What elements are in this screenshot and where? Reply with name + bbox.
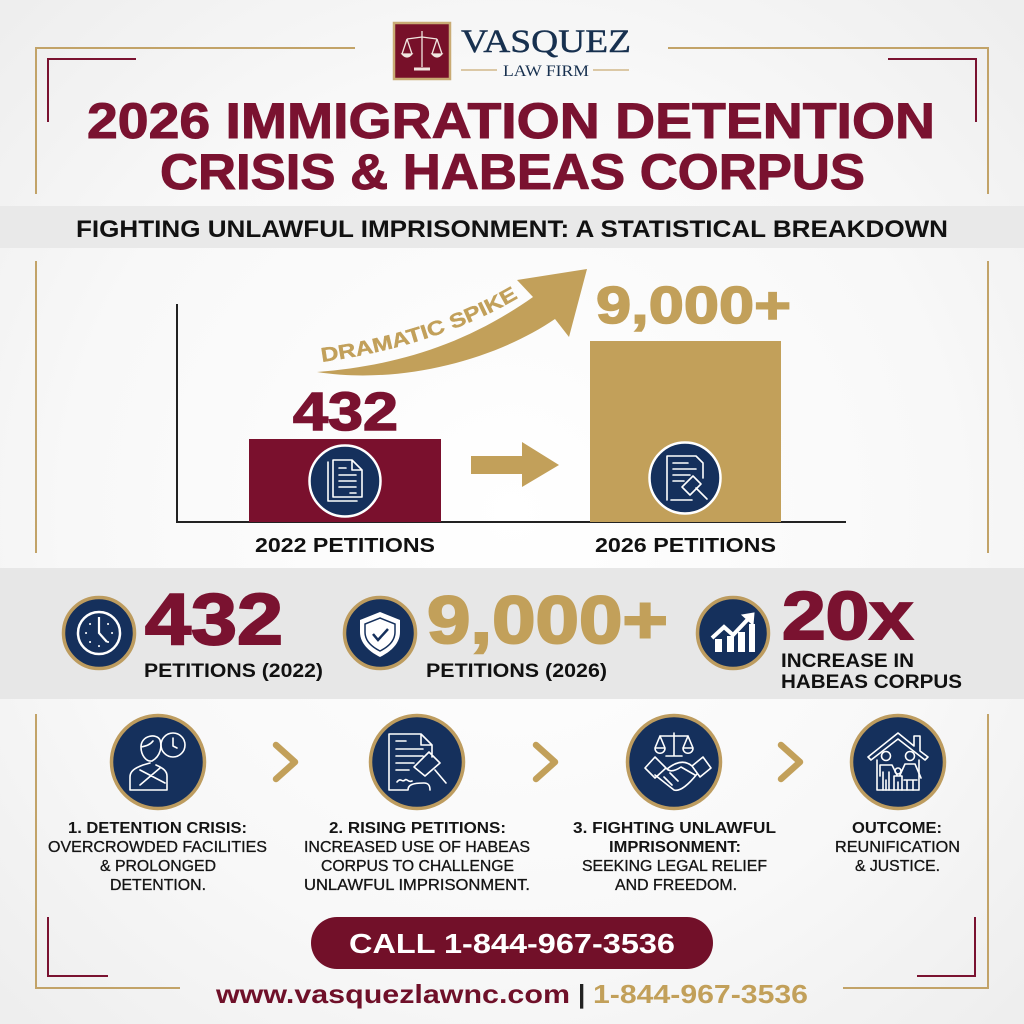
arrow: chevron 3 bbox=[781, 745, 800, 779]
panel: step 3 fighting unlawful imprisonment bbox=[573, 716, 776, 894]
icon: scales of justice logo bbox=[394, 23, 450, 79]
bar: 2022 bbox=[249, 439, 441, 522]
stat: 9,000+ petitions 2026: 9,000+ bbox=[427, 583, 668, 658]
text: step 3: AND FREEDOM. bbox=[615, 877, 737, 894]
label: 2022 petitions: 2022 PETITIONS bbox=[255, 535, 435, 557]
footer contact line: | bbox=[578, 979, 585, 1009]
text: step 1: 1. DETENTION CRISIS: bbox=[68, 820, 247, 837]
bar: 2026 bbox=[590, 341, 781, 522]
icon: shield bbox=[344, 598, 416, 668]
panel: step 1 detention crisis bbox=[48, 716, 267, 894]
icon: document and gavel bbox=[650, 442, 720, 514]
title bbox=[87, 93, 935, 200]
stat: 20x increase: 20x bbox=[782, 578, 913, 654]
text: outcome: REUNIFICATION bbox=[835, 839, 960, 856]
text: step 3 bbox=[573, 820, 776, 894]
text: step 1 bbox=[48, 820, 267, 894]
value: 432: 432 bbox=[293, 382, 398, 442]
text: outcome: OUTCOME: bbox=[852, 820, 942, 837]
stat: 20x increase: INCREASE IN bbox=[781, 650, 914, 672]
text: step 3: SEEKING LEGAL RELIEF bbox=[582, 858, 767, 875]
icon: family in house bbox=[852, 716, 944, 808]
text: step 2: INCREASED USE OF HABEAS bbox=[304, 839, 530, 856]
stat: 20x increase bbox=[698, 578, 962, 693]
call to action button: CALL 1-844-967-3536 bbox=[349, 928, 675, 959]
text: step 1: DETENTION. bbox=[110, 877, 206, 894]
footer contact line bbox=[215, 979, 808, 1009]
call to action button bbox=[311, 917, 713, 969]
logo wordmark: VASQUEZ bbox=[461, 24, 631, 60]
text: step 1: & PROLONGED bbox=[100, 858, 216, 875]
arrow: chevron 1 bbox=[276, 745, 295, 779]
icon: detained person and clock bbox=[112, 716, 204, 808]
arrow: dramatic spike: DRAMATIC SPIKE bbox=[321, 286, 518, 362]
icon: petition and gavel bbox=[370, 716, 464, 808]
text: outcome: & JUSTICE. bbox=[855, 858, 940, 875]
logo: Vasquez Law Firm bbox=[394, 23, 631, 80]
text: step 2: UNLAWFUL IMPRISONMENT. bbox=[304, 877, 530, 894]
icon: documents bbox=[310, 446, 380, 516]
icon: scales and handshake bbox=[628, 716, 720, 808]
text: step 2 bbox=[304, 820, 530, 894]
stat: 432 petitions 2022: 432 bbox=[145, 580, 283, 660]
label: 2026 petitions: 2026 PETITIONS bbox=[595, 535, 776, 557]
stat: 432 petitions 2022: PETITIONS (2022) bbox=[144, 660, 323, 682]
text: outcome bbox=[835, 820, 960, 875]
panel: statistics band bbox=[0, 568, 1024, 699]
stat: 9,000+ petitions 2026 bbox=[344, 583, 668, 682]
text: step 3: IMPRISONMENT: bbox=[609, 839, 741, 856]
footer contact line: www.vasquezlawnc.com bbox=[215, 979, 570, 1009]
subtitle band bbox=[0, 206, 1024, 248]
text: step 2: CORPUS TO CHALLENGE bbox=[321, 858, 514, 875]
text: step 2: 2. RISING PETITIONS: bbox=[329, 820, 506, 837]
icon: rising chart bbox=[698, 598, 768, 668]
panel: step 2 rising petitions bbox=[304, 716, 530, 894]
stat: 20x increase: HABEAS CORPUS bbox=[781, 671, 962, 693]
arrow: dramatic spike bbox=[317, 269, 587, 376]
stat: 432 petitions 2022 bbox=[64, 580, 323, 682]
text: step 3: 3. FIGHTING UNLAWFUL bbox=[573, 820, 776, 837]
arrow: between bars bbox=[471, 442, 559, 487]
subtitle band: FIGHTING UNLAWFUL IMPRISONMENT: A STATISTICAL BREAKDOWN bbox=[76, 216, 948, 243]
icon: clock bbox=[64, 598, 134, 668]
text: step 1: OVERCROWDED FACILITIES bbox=[48, 839, 267, 856]
footer contact line: 1-844-967-3536 bbox=[593, 979, 808, 1009]
logo subline: LAW FIRM bbox=[503, 63, 589, 80]
title: CRISIS & HABEAS CORPUS bbox=[160, 144, 865, 200]
panel: outcome bbox=[835, 716, 960, 875]
stat: 9,000+ petitions 2026: PETITIONS (2026) bbox=[426, 660, 607, 682]
arrow: chevron 2 bbox=[536, 745, 555, 779]
title: 2026 IMMIGRATION DETENTION bbox=[87, 93, 935, 149]
bar chart: petitions 2022 vs 2026 bbox=[176, 269, 846, 557]
value: 9,000+: 9,000+ bbox=[596, 277, 791, 335]
